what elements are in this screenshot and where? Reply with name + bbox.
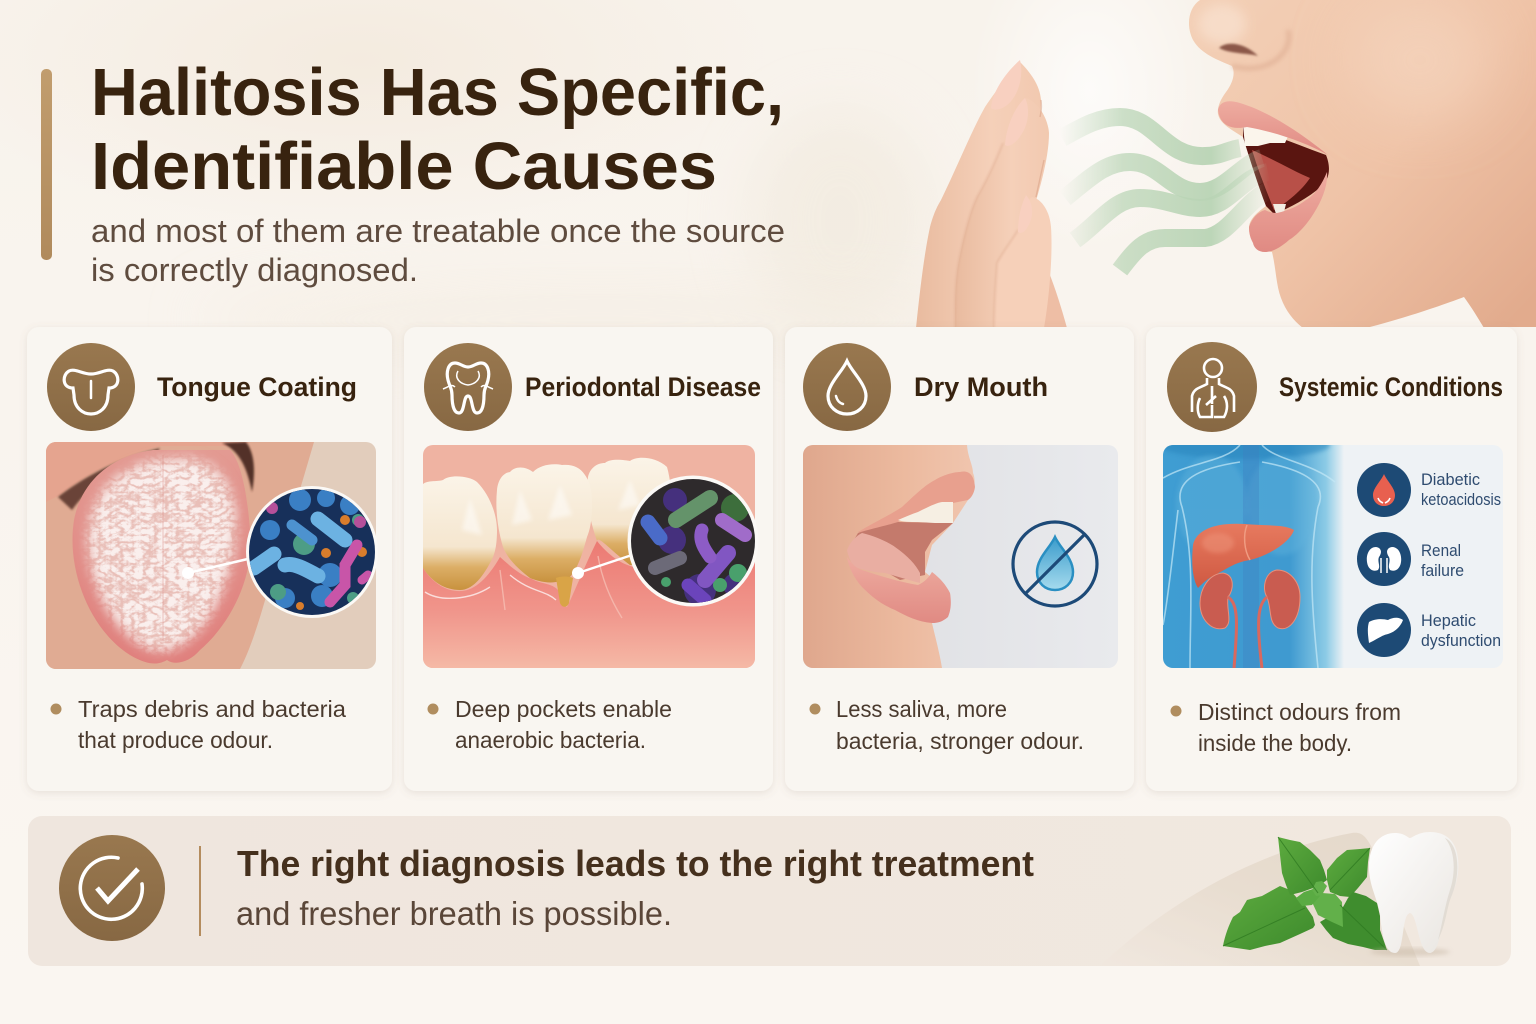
- condition: hepatic dysfunction: [1357, 603, 1501, 657]
- kidneys: [1200, 570, 1300, 668]
- bullet: periodontal disease: Deep pockets enable: [455, 696, 672, 722]
- condition: diabetic ketoacidosis: ketoacidosis: [1421, 491, 1501, 509]
- icon: tongue: [47, 343, 135, 431]
- title: [91, 55, 784, 204]
- illustration: mint leaves: [1223, 837, 1387, 950]
- magnifier: bacteria: [246, 486, 378, 618]
- icon: check mark: [59, 835, 165, 941]
- icon: torso with organs: [1167, 342, 1257, 432]
- image: torso with liver and kidneys: [1160, 431, 1503, 668]
- banner: conclusion: [28, 816, 1511, 966]
- subtitle: [91, 213, 785, 288]
- illustration: tooth: [1369, 832, 1458, 956]
- conclusion heading: The right diagnosis leads to the right treatment: [237, 843, 1034, 884]
- heading: tongue coating: Tongue Coating: [157, 372, 357, 402]
- condition: hepatic dysfunction: dysfunction: [1421, 632, 1501, 650]
- conclusion subtext: and fresher breath is possible.: [236, 895, 672, 932]
- subtitle: and most of them are treatable once the source: [91, 213, 785, 249]
- bullet: dry mouth: Less saliva, more: [836, 696, 1007, 722]
- heading: periodontal disease: Periodontal Disease: [525, 372, 761, 402]
- panel: periodontal disease: [404, 327, 773, 791]
- panel: tongue coating: [27, 327, 392, 791]
- condition: renal failure: Renal: [1421, 542, 1461, 560]
- bullet: dry mouth: [810, 696, 1084, 754]
- bullet: systemic conditions: inside the body.: [1198, 730, 1352, 756]
- bullet: tongue coating: Traps debris and bacteria: [78, 696, 346, 722]
- breath waves: [1062, 117, 1270, 270]
- condition: diabetic ketoacidosis: Diabetic: [1421, 471, 1480, 489]
- bullet: tongue coating: [50, 696, 346, 753]
- bullet: dry mouth: bacteria, stronger odour.: [836, 728, 1084, 754]
- connector line: [572, 555, 632, 579]
- panel: dry mouth: [785, 327, 1134, 791]
- condition: renal failure: [1357, 532, 1464, 586]
- image: teeth and inflamed gums: [423, 445, 755, 668]
- condition: renal failure: failure: [1421, 562, 1464, 580]
- subtitle: is correctly diagnosed.: [91, 252, 418, 288]
- title: Identifiable Causes: [91, 129, 717, 204]
- image: coated tongue with bacteria magnifier: [46, 442, 376, 669]
- icon: no water: [1013, 522, 1097, 606]
- title: Halitosis Has Specific,: [91, 55, 784, 130]
- connector line: [182, 558, 252, 579]
- bullet: periodontal disease: anaerobic bacteria.: [455, 727, 646, 753]
- bullet: systemic conditions: [1170, 699, 1401, 756]
- bullet: periodontal disease: [428, 696, 672, 753]
- accent bar: [41, 69, 52, 260]
- open mouth and lips: [1218, 101, 1329, 252]
- bullet: tongue coating: that produce odour.: [78, 727, 273, 753]
- face profile: [1189, 0, 1536, 328]
- hand: [916, 60, 1067, 328]
- heading: dry mouth: Dry Mouth: [914, 372, 1048, 402]
- divider: [199, 846, 201, 936]
- magnifier: bacteria: [628, 476, 758, 606]
- panel: systemic conditions: [1146, 327, 1517, 791]
- condition: hepatic dysfunction: Hepatic: [1421, 612, 1476, 630]
- liver: [1192, 524, 1294, 588]
- image: open dry mouth: [803, 445, 1118, 668]
- icon: tooth: [424, 343, 512, 431]
- bullet: systemic conditions: Distinct odours from: [1198, 699, 1401, 725]
- condition: diabetic ketoacidosis: [1357, 463, 1501, 517]
- photo: woman exhaling breath behind her hand: [916, 0, 1536, 328]
- icon: water drop: [803, 343, 891, 431]
